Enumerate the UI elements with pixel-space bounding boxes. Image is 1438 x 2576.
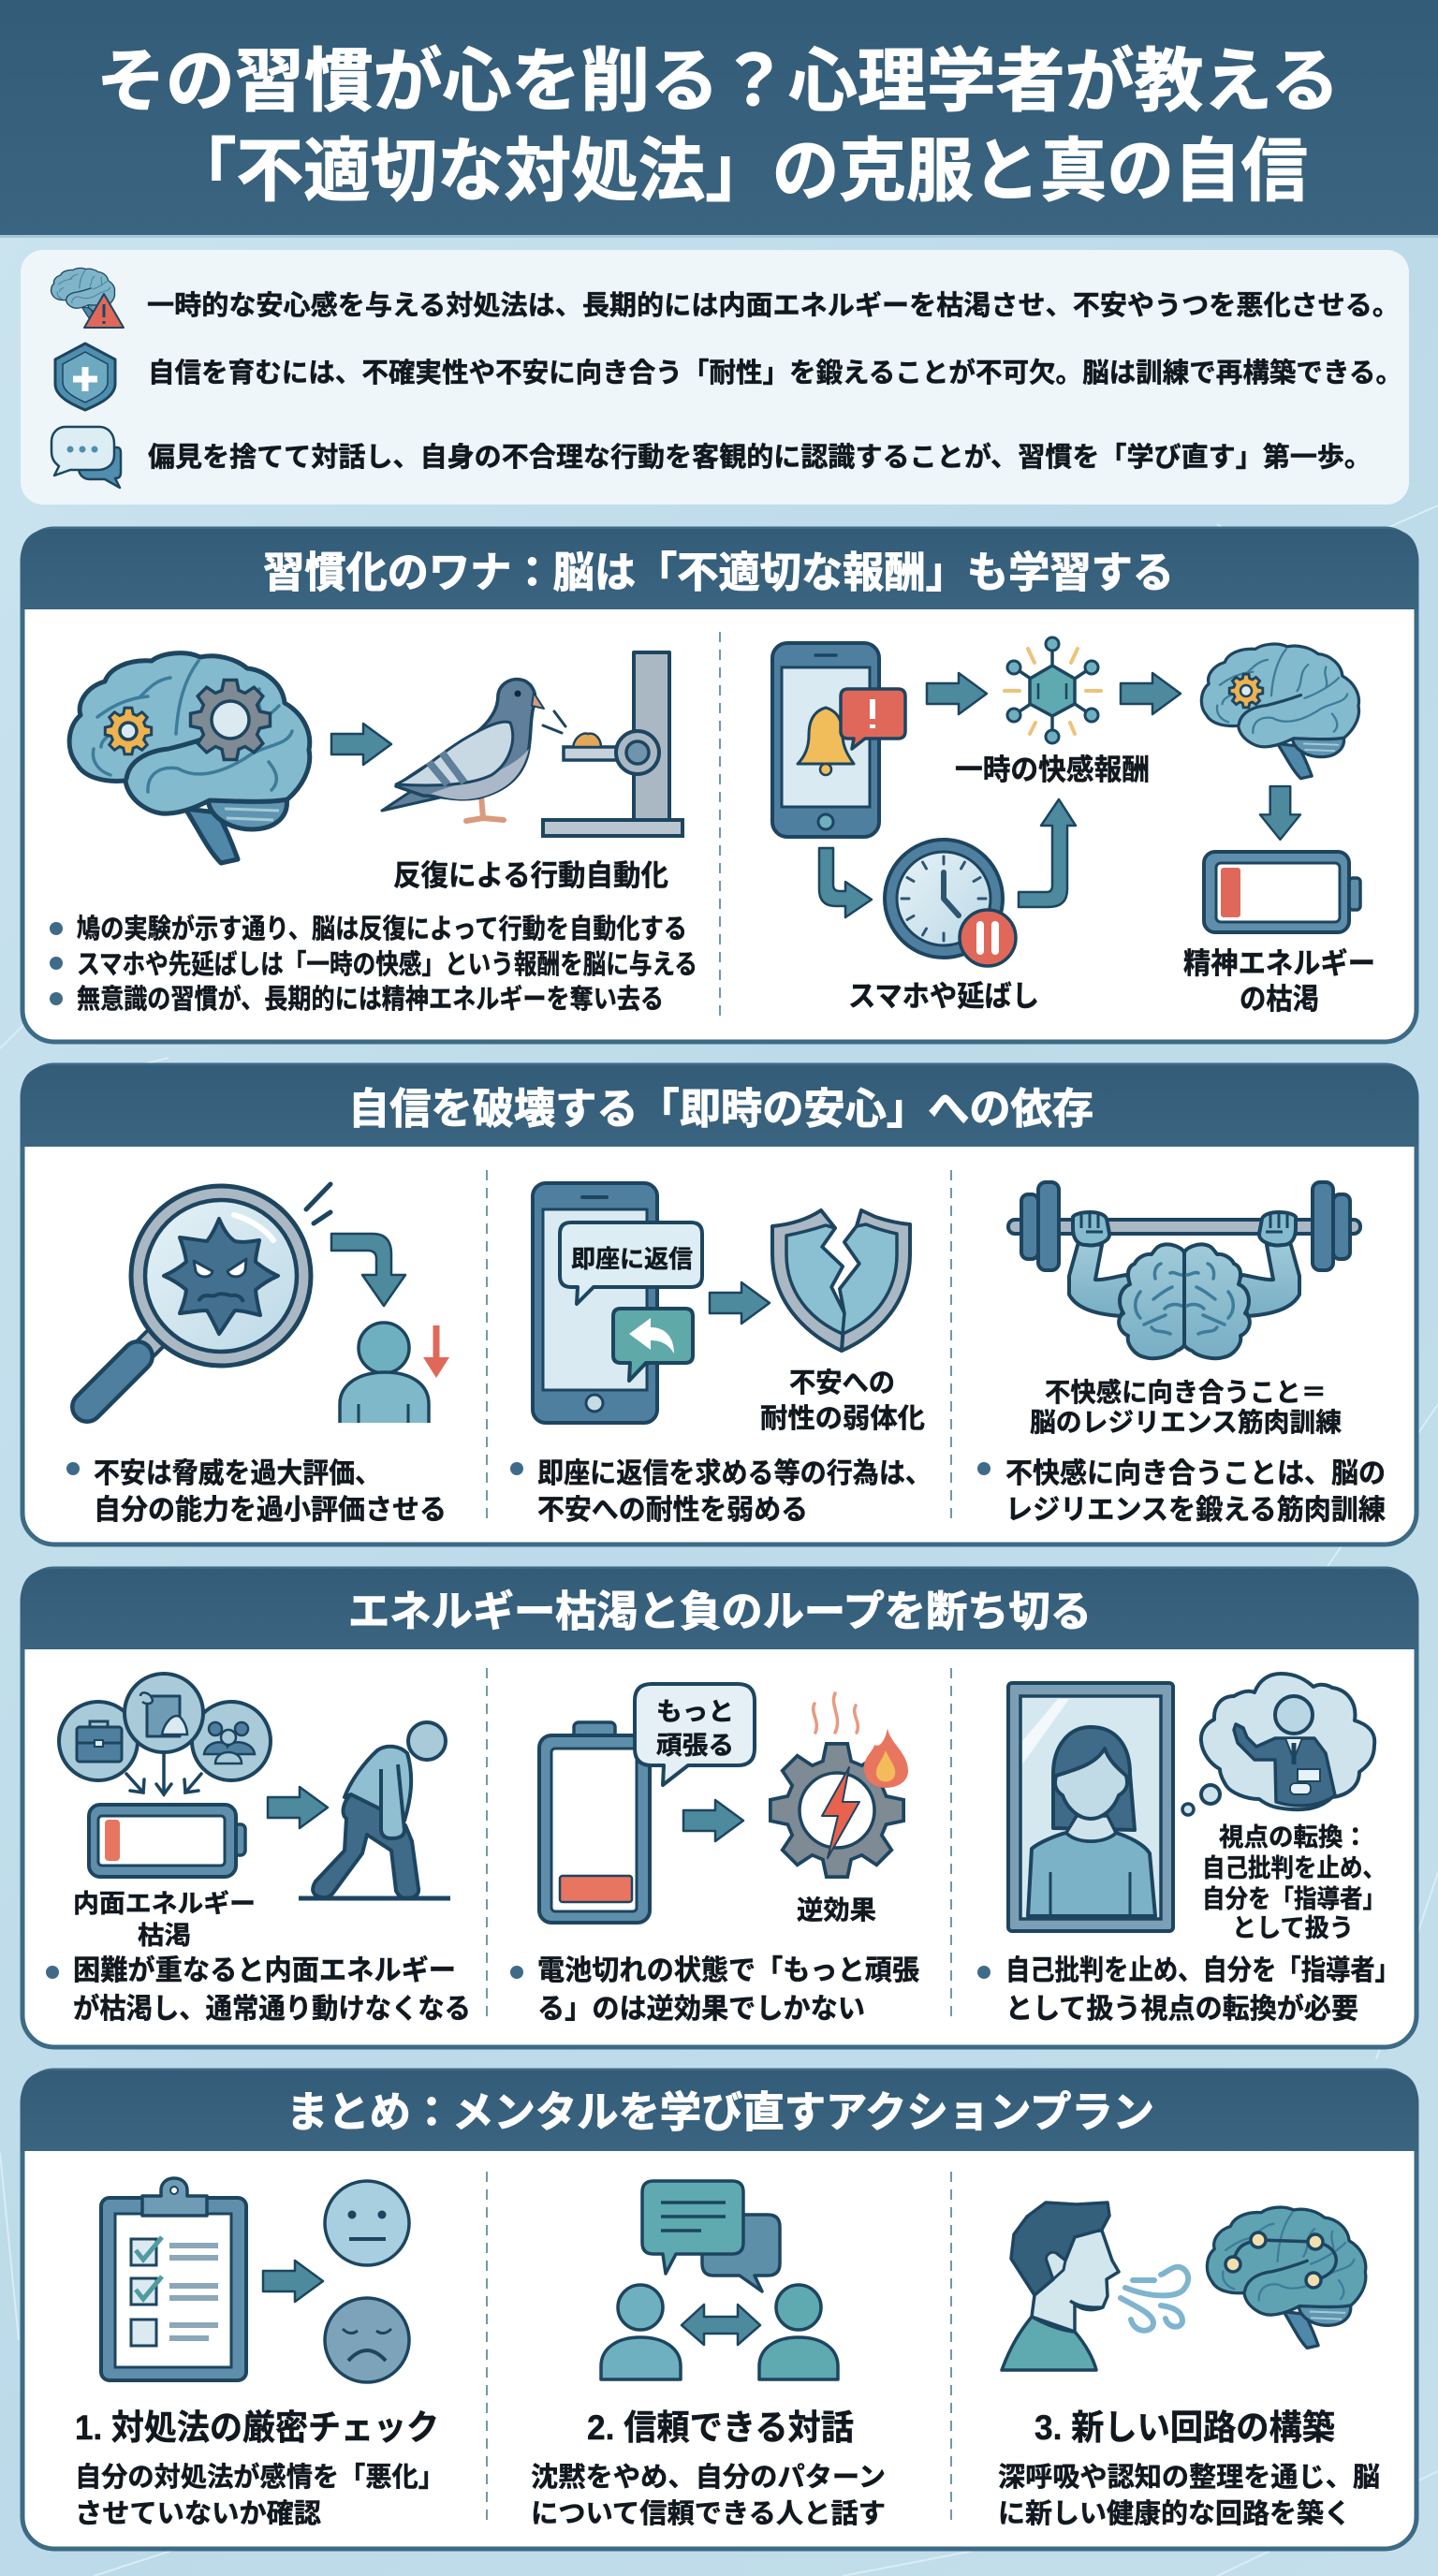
text: takeaway 3: 偏見を捨てて対話し、自身の不合理な行動を客観的に認識することが、習慣を「学び直す」第一歩。 xyxy=(148,441,1372,473)
panel: 即時の安心 xyxy=(21,1065,1418,1544)
heading: まとめ：メンタルを学び直すアクションプラン xyxy=(286,2088,1154,2136)
icon: brain lifting barbell xyxy=(1008,1182,1360,1358)
icon: phone notification xyxy=(772,643,905,837)
heading: action 3: 3. 新しい回路の構築 xyxy=(1034,2408,1335,2447)
icon: low battery xyxy=(1204,852,1360,932)
icon: shrinking person xyxy=(340,1323,449,1423)
arrow xyxy=(1260,786,1300,840)
arrow xyxy=(331,724,391,765)
icon: sad face xyxy=(325,2298,409,2382)
label: 反復による行動自動化 xyxy=(393,859,668,892)
bubble text: 頑張る xyxy=(656,1732,734,1760)
callout text: 自分を「指導者」 xyxy=(1202,1885,1386,1913)
label: スマホや延ばし xyxy=(848,980,1039,1013)
arrow xyxy=(263,2261,323,2302)
label: 脳のレジリエンス筋肉訓練 xyxy=(1030,1408,1342,1437)
label: 一時の快感報酬 xyxy=(955,754,1150,786)
bubble text: もっと xyxy=(656,1698,734,1726)
title line 2: 「不適切な対処法」の克服と真の自信 xyxy=(169,132,1308,210)
callout text: として扱う xyxy=(1232,1914,1354,1942)
bullet: col 1 xyxy=(46,1954,471,2025)
bullet: col 1: が枯渇し、通常通り動けなくなる xyxy=(73,1993,471,2025)
panel: エネルギー枯渇 xyxy=(21,1569,1418,2047)
text: action 1: させていないか確認 xyxy=(75,2498,321,2529)
bullet: col 2: る」のは逆効果でしかない xyxy=(537,1994,865,2025)
text: action 2 xyxy=(531,2462,886,2529)
label: 逆効果 xyxy=(797,1895,876,1925)
text: action 1 xyxy=(75,2461,445,2529)
icon: two people talking xyxy=(601,2181,838,2379)
icon: exhausted person xyxy=(299,1722,450,1898)
bullet list xyxy=(50,913,697,1015)
icon: pigeon with feeder xyxy=(382,652,682,836)
text: action 2: について信頼できる人と話す xyxy=(531,2498,886,2529)
label: 不安への xyxy=(789,1368,895,1398)
text: takeaway 2: 自信を育むには、不確実性や不安に向き合う「耐性」を鍛えることが不可欠。脳は訓練で再構築できる。 xyxy=(148,357,1402,388)
bullet: col 2: 電池切れの状態で「もっと頑張 xyxy=(537,1955,919,1986)
heading: 自信を破壊する「即時の安心」への依存 xyxy=(348,1085,1093,1133)
text: action 3: 深呼吸や認知の整理を通じ、脳 xyxy=(998,2462,1380,2493)
title header xyxy=(0,0,1438,238)
text: action 1: 自分の対処法が感情を「悪化」 xyxy=(75,2461,445,2493)
icon: phone with reply bubbles xyxy=(533,1183,702,1423)
arrow xyxy=(1121,673,1181,714)
arrow xyxy=(268,1787,328,1828)
arrow xyxy=(683,1800,743,1841)
bullet: col 3 xyxy=(977,1458,1386,1526)
icon: brain warning xyxy=(51,268,124,328)
label: 不快感に向き合うこと＝ xyxy=(1045,1378,1327,1407)
bullet: col 3: 不快感に向き合うことは、脳の xyxy=(1005,1458,1386,1489)
label: 耐性の弱体化 xyxy=(760,1403,925,1434)
icon: brain with new circuits xyxy=(1207,2207,1366,2348)
bullet: col 3 xyxy=(977,1955,1400,2025)
bullet list: 無意識の習慣が、長期的には精神エネルギーを奪い去る xyxy=(77,983,664,1015)
text: takeaway 1: 一時的な安心感を与える対処法は、長期的には内面エネルギーを枯渇させ、不安やうつを悪化させる。 xyxy=(147,290,1400,321)
bullet: col 1: 不安は脅威を過大評価、 xyxy=(94,1458,381,1489)
icon: reward molecule xyxy=(1005,637,1101,743)
icon: shield xyxy=(55,344,115,410)
label: 精神エネルギー xyxy=(1183,947,1375,980)
text: action 3: に新しい健康的な回路を築く xyxy=(998,2498,1351,2529)
panel: 習慣化のワナ xyxy=(21,529,1418,1042)
bullet: col 3: として扱う視点の転換が必要 xyxy=(1005,1993,1358,2025)
bullet: col 1: 自分の能力を過小評価させる xyxy=(94,1495,447,1526)
bullet: col 2 xyxy=(510,1955,919,2025)
icon: brain xyxy=(1201,644,1358,779)
icon: mirror with woman xyxy=(1008,1683,1173,1931)
callout text xyxy=(1202,1823,1386,1942)
icon: overheating gear xyxy=(770,1693,908,1877)
bullet: col 3: レジリエンスを鍛える筋肉訓練 xyxy=(1005,1495,1386,1526)
bullet: col 2: 不安への耐性を弱める xyxy=(537,1495,808,1526)
icon: broken shield xyxy=(772,1210,910,1351)
bullet: col 1: 困難が重なると内面エネルギー xyxy=(73,1954,456,1986)
icon: magnifier with threat xyxy=(87,1186,311,1407)
heading: action 1: 1. 対処法の厳密チェック xyxy=(75,2408,439,2447)
bullet list: スマホや先延ばしは「一時の快感」という報酬を脳に与える xyxy=(77,949,697,980)
heading: エネルギー枯渇と負のループを断ち切る xyxy=(348,1588,1092,1635)
heading: action 2: 2. 信頼できる対話 xyxy=(587,2408,854,2447)
bullet: col 2 xyxy=(510,1458,932,1526)
bullet list: 鳩の実験が示す通り、脳は反復によって行動を自動化する xyxy=(77,913,687,944)
heading: 習慣化のワナ：脳は「不適切な報酬」も学習する xyxy=(263,549,1174,596)
icon: clipboard checklist xyxy=(101,2178,246,2380)
icon: stressors xyxy=(59,1674,271,1794)
icon: brain with gears xyxy=(69,653,310,863)
icon: clock pause xyxy=(885,840,1016,966)
icon: person breathing xyxy=(1002,2203,1119,2370)
text: action 2: 沈黙をやめ、自分のパターン xyxy=(531,2462,886,2493)
label: の枯渇 xyxy=(1240,983,1319,1016)
arrow xyxy=(710,1282,770,1324)
icon: thought cloud with mentor xyxy=(1182,1674,1374,1815)
text: action 3 xyxy=(998,2462,1380,2529)
title line 1: その習慣が心を削る？心理学者が教える xyxy=(96,42,1340,120)
icon: empty battery with bubble xyxy=(539,1684,755,1923)
panel: まとめ xyxy=(21,2071,1418,2549)
arrow xyxy=(927,673,987,714)
bubble text: 即座に返信 xyxy=(571,1245,693,1273)
icon: low battery xyxy=(89,1805,245,1877)
bullet: col 2: 即座に返信を求める等の行為は、 xyxy=(537,1458,932,1489)
label: 内面エネルギー xyxy=(73,1890,256,1918)
bullet: col 1 xyxy=(66,1458,447,1526)
icon: neutral face xyxy=(325,2181,409,2265)
icon: motion sparks xyxy=(306,1184,330,1223)
label: 枯渇 xyxy=(138,1922,191,1950)
icon: breath xyxy=(1121,2267,1188,2331)
arrow: down bend xyxy=(331,1234,405,1306)
callout text: 自己批判を止め、 xyxy=(1202,1854,1386,1882)
arrow: clock to reward xyxy=(1019,799,1076,907)
panel: key takeaways xyxy=(21,250,1409,505)
callout text: 視点の転換： xyxy=(1219,1823,1368,1852)
icon: chat bubbles xyxy=(51,427,121,488)
arrow: phone to clock xyxy=(819,848,872,917)
